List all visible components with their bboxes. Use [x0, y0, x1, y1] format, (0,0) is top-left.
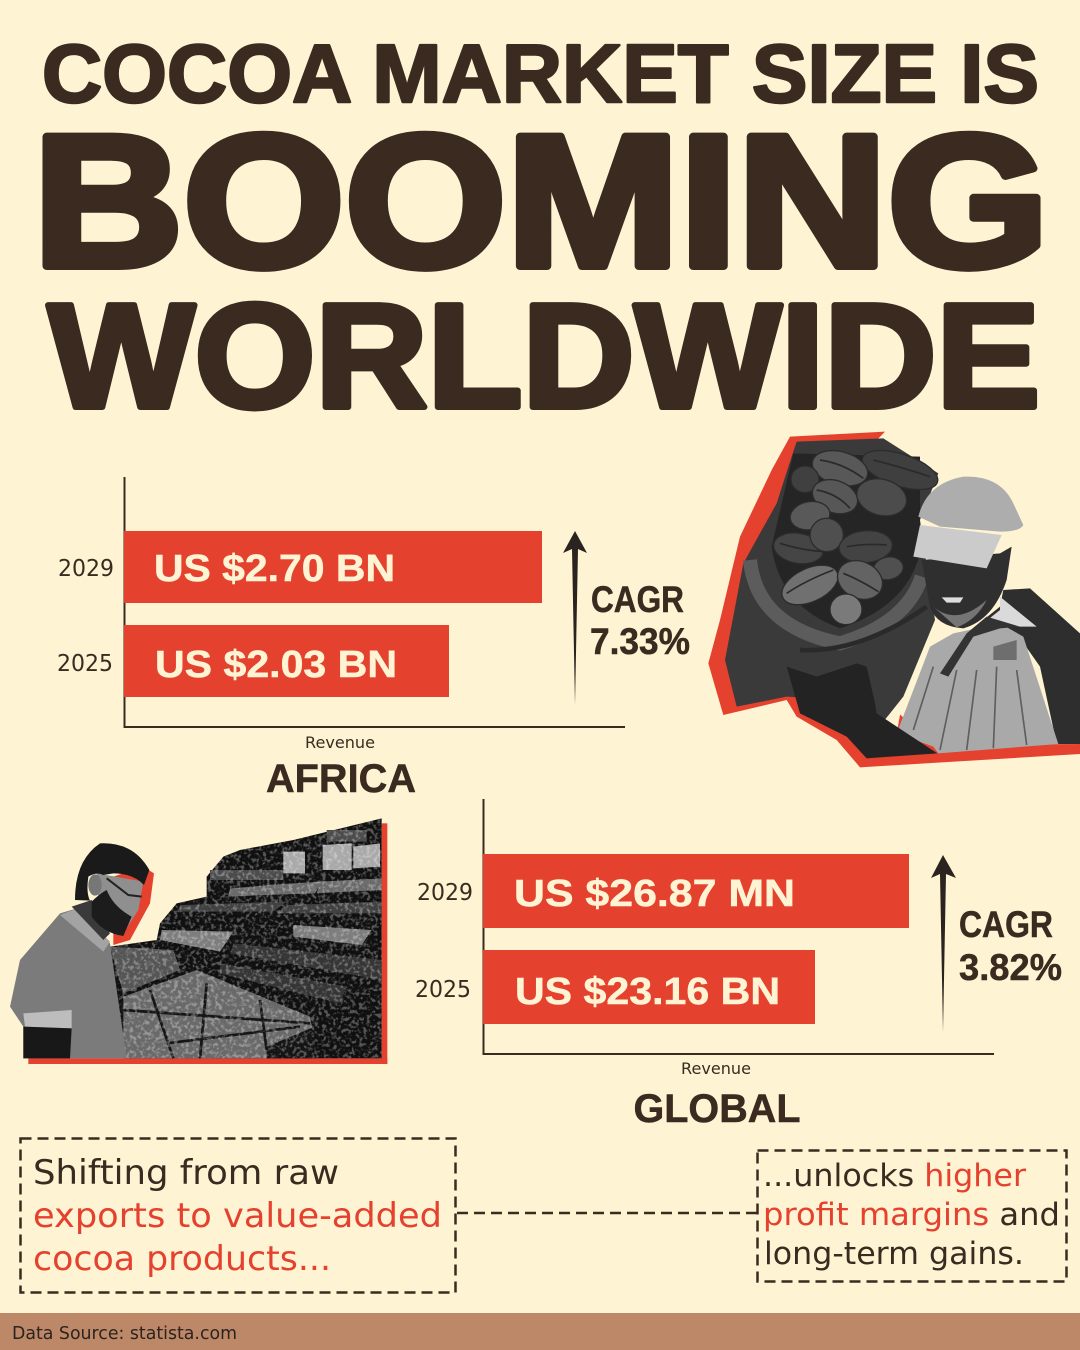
photo: farmer carrying cocoa sack [708, 432, 1080, 767]
arrow: growth [931, 855, 956, 1032]
panel: Africa revenue chart [57, 477, 690, 801]
sack [725, 438, 938, 722]
bar: 2029: US $2.70 BN [154, 548, 395, 590]
arm and hand [787, 663, 937, 758]
CAGR label: CAGR [959, 904, 1053, 945]
callout: profit margins: profit margins and [763, 1197, 1060, 1233]
title [33, 27, 1049, 439]
title: BOOMING [33, 96, 1049, 306]
axes [124, 477, 625, 727]
callout: profit margins: ...unlocks higher [763, 1158, 1026, 1194]
callout: profit margins [758, 1150, 1066, 1282]
shelves [107, 817, 383, 1060]
cocoa pods [771, 443, 942, 625]
connector line [457, 1212, 757, 1214]
cap [918, 477, 1023, 532]
title: COCOA MARKET SIZE IS [42, 27, 1039, 120]
title: WORLDWIDE [48, 274, 1040, 439]
CAGR label [590, 579, 690, 662]
callout: profit margins: long-term gains. [764, 1236, 1024, 1272]
bar: 2025 [124, 625, 449, 697]
CAGR label: 3.82% [959, 947, 1062, 988]
panel: Global revenue chart [415, 799, 1062, 1131]
bar: 2029 [483, 854, 909, 928]
callout: shifting from raw exports: Shifting from raw [33, 1153, 339, 1193]
year labels: 2029 [58, 556, 114, 582]
CAGR label: CAGR [591, 579, 684, 620]
sack opening [772, 453, 920, 628]
photo: man at chocolate shop shelves [10, 817, 387, 1064]
year labels: 2025 [57, 651, 113, 677]
bar: 2025 [483, 950, 815, 1024]
footer: data source [0, 1313, 1080, 1350]
callout: shifting from raw exports [20, 1138, 456, 1292]
year labels [415, 880, 473, 1003]
red cutout edge [708, 432, 1080, 767]
axes [484, 799, 994, 1054]
CAGR label [959, 904, 1062, 988]
bag on the shoulder [967, 588, 1080, 744]
region heading: AFRICA [266, 757, 416, 801]
face [922, 547, 1012, 628]
gap under the arm [883, 697, 903, 733]
bar: 2029 [124, 531, 542, 603]
year labels [57, 556, 114, 677]
axis label: Revenue [305, 733, 375, 752]
CAGR label: 7.33% [590, 621, 690, 662]
bar: 2025: US $23.16 BN [515, 971, 780, 1013]
callout: shifting from raw exports: cocoa products... [33, 1239, 331, 1279]
bar: 2029: US $26.87 MN [514, 873, 795, 915]
axis label: Revenue [681, 1059, 751, 1078]
man [10, 843, 149, 1058]
red shadow [28, 823, 387, 1064]
region heading: GLOBAL [634, 1087, 800, 1131]
year labels: 2025 [415, 977, 471, 1003]
strap collar [967, 597, 1037, 637]
footer: data source: Data Source: statista.com [12, 1323, 237, 1344]
callout: shifting from raw exports: exports to value-added [33, 1196, 442, 1236]
arrow: growth [563, 531, 587, 705]
bar: 2025: US $2.03 BN [155, 644, 397, 686]
shirt [897, 623, 1058, 753]
pod ridges [780, 460, 930, 593]
year labels: 2029 [417, 880, 473, 906]
